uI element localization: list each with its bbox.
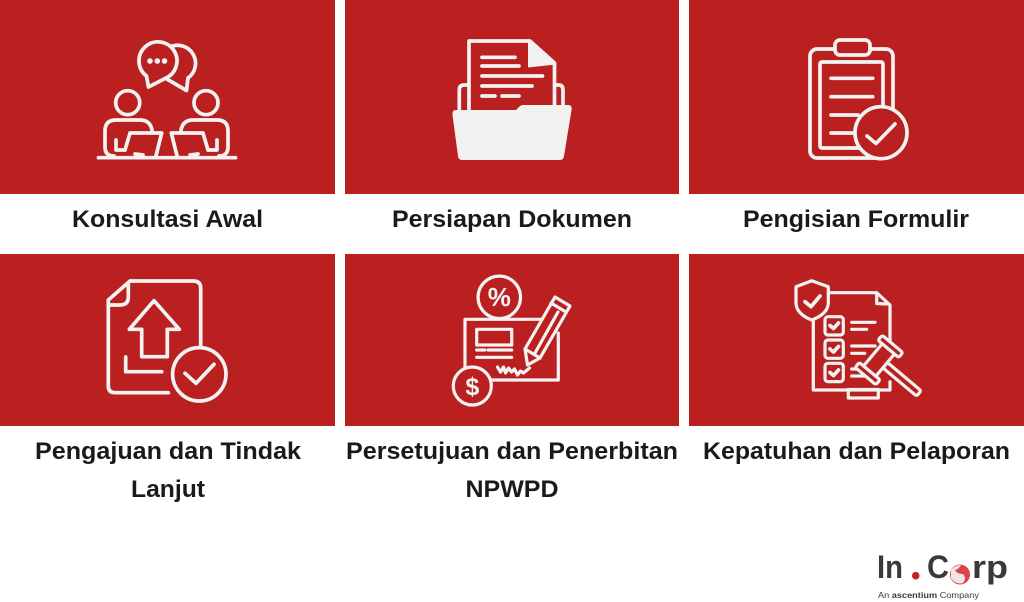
panel: Konsultasi Awal <box>0 0 335 233</box>
logo tagline: An ascentium Company <box>878 590 980 600</box>
panel: Pengajuan dan Tindak Lanjut <box>0 254 335 503</box>
icon: upload document with check <box>108 281 226 401</box>
label: Konsultasi Awal: Konsultasi Awal <box>72 206 263 233</box>
label: Persetujuan dan Penerbitan NPWPD <box>346 438 678 503</box>
percent sign: % <box>488 282 511 312</box>
label: Persetujuan dan Penerbitan NPWPD: Persetujuan dan Penerbitan <box>346 438 678 465</box>
label: Kepatuhan dan Pelaporan: Kepatuhan dan Pelaporan <box>703 438 1010 465</box>
icon: folder with document <box>452 41 572 160</box>
icon: two people consulting <box>98 42 236 158</box>
label: Pengisian Formulir: Pengisian Formulir <box>743 206 969 233</box>
logo globe <box>950 564 970 584</box>
dollar sign: $ <box>465 373 479 401</box>
label: Persiapan Dokumen: Persiapan Dokumen <box>392 206 632 233</box>
panel: Kepatuhan dan Pelaporan <box>689 254 1024 465</box>
panel: Persetujuan dan Penerbitan NPWPD <box>345 254 679 503</box>
logo: InCorp: rp <box>972 549 1008 585</box>
logo: InCorp: C <box>927 549 949 585</box>
icon: compliance checklist with gavel <box>796 281 932 410</box>
icon: clipboard with check <box>810 40 907 159</box>
icon: cheque, pencil, percent and dollar <box>453 276 570 405</box>
label: Persetujuan dan Penerbitan NPWPD: NPWPD <box>466 476 558 503</box>
logo: InCorp: In <box>877 549 903 585</box>
label: Pengajuan dan Tindak Lanjut: Pengajuan dan Tindak <box>35 438 302 465</box>
logo: InCorp <box>877 549 1008 600</box>
panel: Pengisian Formulir <box>689 0 1024 233</box>
label: Pengajuan dan Tindak Lanjut: Lanjut <box>131 476 205 503</box>
panel: Persiapan Dokumen <box>345 0 679 233</box>
label: Pengajuan dan Tindak Lanjut <box>35 438 302 503</box>
